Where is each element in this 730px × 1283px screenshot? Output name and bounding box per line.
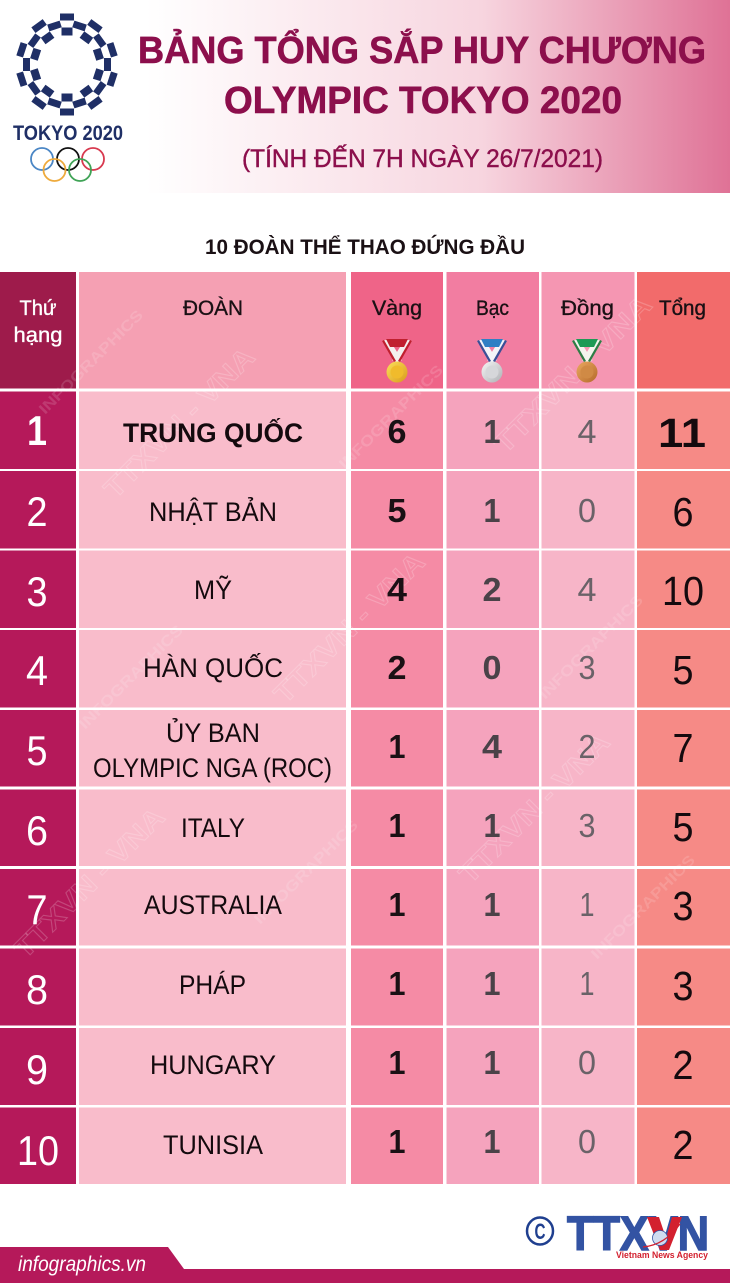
footer band bbox=[0, 1247, 730, 1283]
silver counts bbox=[482, 413, 503, 1160]
icon: copyright mark bbox=[527, 1218, 553, 1244]
watermarks: TTXVN - VNA bbox=[453, 727, 616, 889]
icon: checkered ring emblem bbox=[16, 14, 118, 116]
bronze counts: 1 bbox=[580, 965, 594, 1002]
watermarks: TTXVN - VNA bbox=[98, 342, 261, 504]
table header labels bbox=[14, 297, 706, 347]
rank header: Thứ bbox=[20, 297, 56, 320]
total counts: 2 bbox=[672, 1042, 694, 1088]
silver header: Bạc bbox=[476, 297, 509, 320]
team names: MỸ bbox=[194, 574, 232, 605]
icon: bronze medal bbox=[572, 339, 602, 382]
gold counts bbox=[387, 413, 408, 1160]
bronze counts: 4 bbox=[578, 571, 596, 608]
total header: Tổng bbox=[659, 297, 706, 320]
icon: olympic rings bbox=[31, 148, 104, 181]
team names: ỦY BAN bbox=[166, 716, 260, 748]
total counts: 6 bbox=[672, 489, 694, 535]
watermarks bbox=[8, 290, 699, 964]
team names: AUSTRALIA bbox=[144, 890, 282, 920]
watermarks: INFOGRAPHICS bbox=[251, 817, 362, 928]
watermarks: INFOGRAPHICS bbox=[588, 852, 699, 963]
bronze header: Đồng bbox=[561, 297, 614, 320]
bronze counts: 4 bbox=[578, 413, 596, 450]
rank column: 3 bbox=[26, 568, 48, 615]
total counts: 2 bbox=[672, 1122, 694, 1168]
silver counts: 1 bbox=[484, 1123, 500, 1160]
gold counts: 1 bbox=[388, 728, 406, 765]
gold counts: 1 bbox=[388, 965, 406, 1002]
bronze counts: 3 bbox=[578, 649, 596, 686]
gold counts: 2 bbox=[388, 649, 406, 686]
gold header: Vàng bbox=[372, 297, 422, 320]
rank column: 7 bbox=[26, 886, 48, 933]
watermarks: INFOGRAPHICS bbox=[536, 592, 647, 703]
bronze counts: 0 bbox=[578, 1044, 596, 1081]
silver counts: 1 bbox=[484, 1044, 500, 1081]
watermarks: INFOGRAPHICS bbox=[336, 362, 447, 473]
team names: OLYMPIC NGA (ROC) bbox=[93, 753, 332, 783]
rank column: 9 bbox=[26, 1046, 48, 1093]
team names: ITALY bbox=[181, 813, 245, 843]
logo: TTXVN: TTXVN bbox=[567, 1208, 709, 1261]
gold counts: 1 bbox=[388, 1123, 406, 1160]
silver counts: 1 bbox=[484, 492, 500, 529]
silver counts: 4 bbox=[482, 728, 503, 765]
footer site name: infographics.vn bbox=[18, 1253, 146, 1276]
subtitle: date: (TÍNH ĐẾN 7H NGÀY 26/7/2021) bbox=[242, 144, 603, 173]
team names: HÀN QUỐC bbox=[143, 651, 283, 683]
header band bbox=[0, 0, 730, 193]
rank column: 8 bbox=[26, 966, 48, 1013]
silver counts: 0 bbox=[482, 649, 502, 686]
total counts: 7 bbox=[672, 725, 694, 771]
rank column: 4 bbox=[26, 647, 48, 694]
title: BẢNG TỔNG SẮP HUY CHƯƠNG bbox=[138, 27, 706, 72]
bronze counts: 1 bbox=[580, 886, 594, 923]
silver counts: 1 bbox=[484, 886, 500, 923]
title: OLYMPIC TOKYO 2020 bbox=[224, 80, 622, 122]
total counts: 10 bbox=[662, 568, 704, 614]
total counts: 3 bbox=[672, 963, 694, 1009]
team names bbox=[93, 416, 332, 1160]
icon: copyright mark: C bbox=[534, 1219, 546, 1244]
rank column: 6 bbox=[26, 807, 48, 854]
total counts bbox=[658, 410, 706, 1168]
total counts: 3 bbox=[672, 883, 694, 929]
rank column bbox=[17, 407, 59, 1174]
total counts: 5 bbox=[672, 647, 694, 693]
rank header bbox=[14, 297, 62, 347]
bronze counts: 2 bbox=[578, 728, 596, 765]
silver counts: 2 bbox=[482, 571, 502, 608]
rank column: 2 bbox=[26, 488, 48, 535]
icon: red V and globe bbox=[643, 1217, 682, 1250]
icon: silver medal bbox=[477, 339, 507, 382]
rank column: 1 bbox=[27, 407, 47, 454]
team names: TRUNG QUỐC bbox=[123, 416, 303, 448]
table heading: 10 ĐOÀN THỂ THAO ĐỨNG ĐẦU bbox=[205, 235, 525, 259]
gold counts: 5 bbox=[388, 492, 406, 529]
rank column: 5 bbox=[26, 727, 48, 774]
team names: HUNGARY bbox=[150, 1050, 276, 1080]
silver counts: 1 bbox=[484, 413, 500, 450]
logo wordmark: TOKYO 2020 bbox=[13, 122, 123, 145]
gold counts: 1 bbox=[388, 886, 406, 923]
gold counts: 6 bbox=[388, 413, 406, 450]
gold counts: 1 bbox=[388, 807, 406, 844]
silver counts: 1 bbox=[484, 807, 500, 844]
logo: Tokyo 2020 bbox=[13, 14, 123, 181]
watermarks: INFOGRAPHICS bbox=[36, 307, 147, 418]
team header: ĐOÀN bbox=[183, 297, 243, 320]
silver counts: 1 bbox=[484, 965, 500, 1002]
table column fills bbox=[0, 272, 730, 1184]
watermarks: TTXVN - VNA bbox=[8, 802, 171, 964]
total counts: 11 bbox=[658, 410, 706, 456]
agency tagline: Vietnam News Agency bbox=[616, 1250, 709, 1261]
watermarks: TTXVN - VNA bbox=[488, 290, 658, 459]
watermarks: TTXVN - VNA bbox=[268, 547, 431, 709]
bronze counts: 0 bbox=[578, 492, 596, 529]
bronze counts: 0 bbox=[578, 1123, 596, 1160]
gold counts: 1 bbox=[388, 1044, 406, 1081]
total counts: 5 bbox=[672, 804, 694, 850]
watermarks: INFOGRAPHICS bbox=[76, 622, 187, 733]
gold counts: 4 bbox=[387, 571, 408, 608]
team names: PHÁP bbox=[179, 970, 246, 1000]
title bbox=[138, 27, 706, 122]
rank column: 10 bbox=[17, 1127, 59, 1174]
team names: TUNISIA bbox=[163, 1130, 263, 1160]
team names: NHẬT BẢN bbox=[149, 495, 277, 527]
bronze counts bbox=[578, 413, 596, 1160]
icon: gold medal bbox=[382, 339, 412, 382]
bronze counts: 3 bbox=[578, 807, 596, 844]
rank header: hạng bbox=[14, 324, 62, 347]
